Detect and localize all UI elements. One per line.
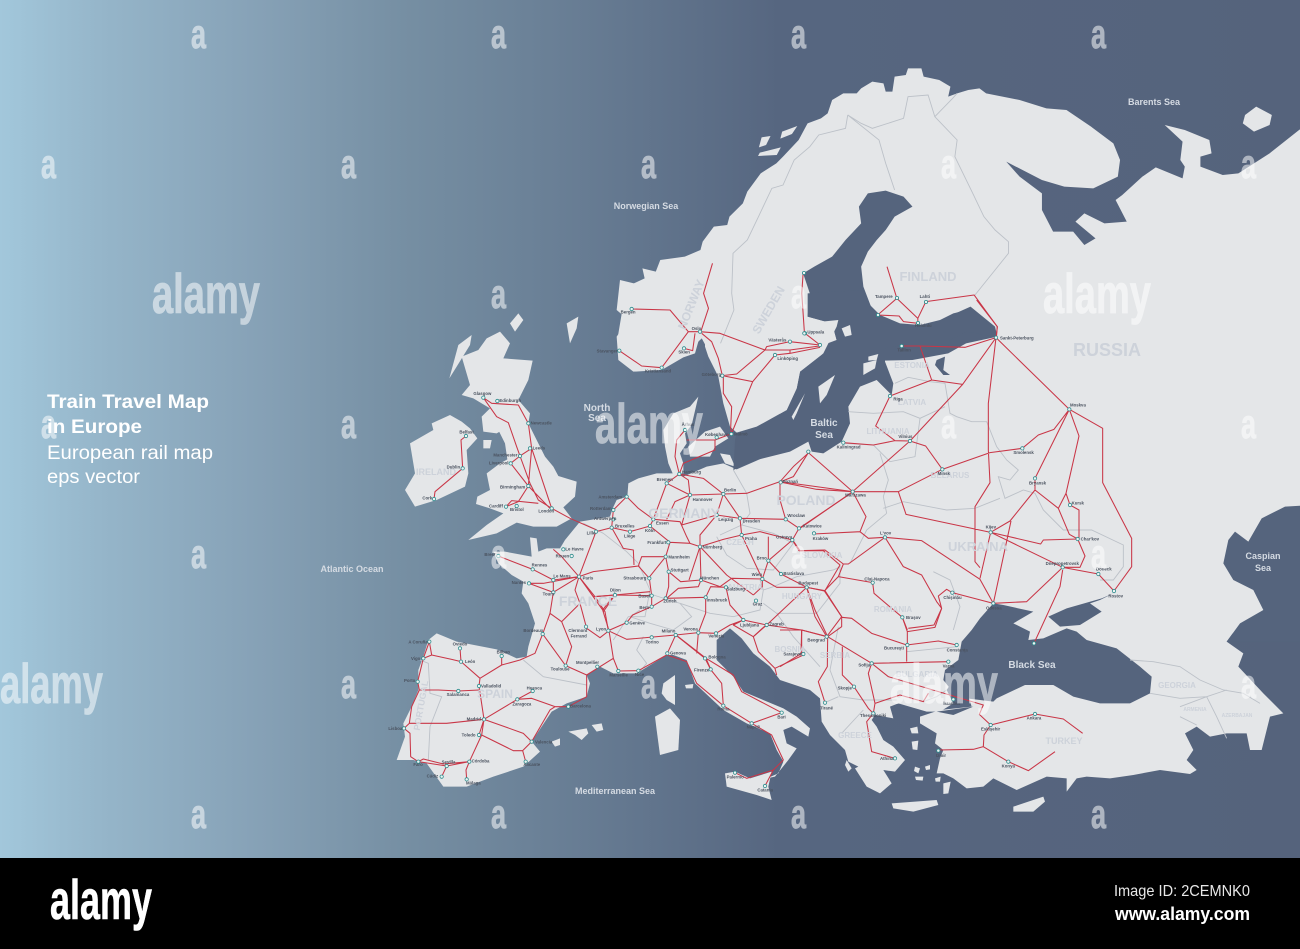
- city labels: Rouen: [556, 553, 569, 558]
- city labels: Helsinki: [915, 323, 932, 328]
- country labels: TURKEY: [1045, 736, 1083, 746]
- sea labels: Norwegian Sea: [614, 201, 679, 211]
- city labels: Nürnberg: [703, 544, 722, 549]
- title block: in Europe: [47, 417, 142, 438]
- city labels: Huesca: [527, 685, 543, 690]
- city labels: Birmingham: [500, 484, 525, 489]
- city labels: Valencia: [535, 740, 553, 745]
- city labels: Toledo: [462, 733, 476, 738]
- city labels: Cork: [422, 495, 433, 500]
- city labels: Malmö: [734, 432, 748, 437]
- title block: European rail map: [47, 443, 213, 464]
- country labels: LATVIA: [898, 398, 926, 407]
- city labels: Izmir: [936, 753, 946, 758]
- city labels: Kaliningrad: [837, 444, 861, 449]
- city labels: Constanţa: [947, 647, 968, 652]
- country labels: ROMANIA: [874, 605, 912, 614]
- city labels: Firenze: [694, 667, 710, 672]
- title block: [47, 392, 213, 488]
- watermarks: a: [41, 401, 57, 447]
- city labels: Riga: [893, 397, 903, 402]
- watermarks: a: [341, 141, 357, 187]
- city labels: Cardiff: [489, 504, 504, 509]
- country labels: ARMENIA: [1183, 707, 1207, 713]
- city labels: [388, 294, 1124, 792]
- city labels: Liverpool: [489, 460, 508, 465]
- city labels: Sevilla: [442, 759, 456, 764]
- city labels: Oviedo: [453, 641, 468, 646]
- city labels: Århus: [682, 422, 695, 427]
- watermarks: a: [791, 11, 807, 57]
- watermarks: alamy: [890, 652, 998, 715]
- watermarks: a: [491, 791, 507, 837]
- city labels: Bergen: [621, 309, 636, 314]
- country labels: SERBIA: [820, 651, 850, 660]
- watermarks: a: [791, 271, 807, 317]
- station markers: [402, 271, 1116, 788]
- watermarks: a: [641, 141, 657, 187]
- city labels: Bordeaux: [523, 628, 544, 633]
- city labels: Dublin: [447, 464, 460, 469]
- city labels: A Coruña: [408, 639, 428, 644]
- city labels: Doneck: [1096, 567, 1112, 572]
- city labels: Genève: [629, 621, 646, 626]
- city labels: Clermont: [568, 628, 588, 633]
- sea labels: Atlantic Ocean: [320, 564, 384, 574]
- country labels: GREECE: [838, 731, 873, 740]
- city labels: Le Havre: [565, 546, 584, 551]
- city labels: Genova: [670, 650, 686, 655]
- city labels: Vilnius: [898, 434, 913, 439]
- watermarks: a: [1091, 791, 1107, 837]
- city labels: Göteborg: [702, 372, 721, 377]
- city labels: Zürich: [663, 599, 677, 604]
- city labels: Kursk: [1072, 500, 1085, 505]
- watermarks: alamy: [152, 262, 260, 325]
- city labels: Verona: [683, 626, 698, 631]
- city labels: Minsk: [938, 471, 951, 476]
- city labels: Salzburg: [727, 587, 745, 592]
- sea labels: North: [584, 403, 610, 414]
- city labels: Eskişehir: [981, 727, 1001, 732]
- city labels: Lahti: [920, 294, 930, 299]
- country labels: POLAND: [776, 492, 836, 508]
- city labels: Cádiz: [427, 773, 438, 778]
- southern Scandinavia and Baltic islands: [617, 280, 878, 433]
- city labels: Bristol: [510, 507, 524, 512]
- city labels: Bruxelles: [615, 523, 635, 528]
- city labels: Barcelona: [570, 703, 592, 708]
- city labels: Uppsala: [807, 330, 825, 335]
- watermarks: a: [1241, 141, 1257, 187]
- watermarks: a: [191, 791, 207, 837]
- country labels: AZERBAJAN: [1222, 713, 1253, 719]
- city labels: Bari: [777, 715, 786, 720]
- seas cut out of the land: Baltic, Black Sea, Caspian: [733, 191, 1300, 715]
- city labels: Amsterdam: [598, 494, 622, 499]
- footer bar: alamy: [50, 868, 152, 931]
- country labels: SLOVAKIA: [802, 551, 843, 560]
- city labels: Antwerpen: [594, 516, 617, 521]
- watermarks: a: [491, 271, 507, 317]
- city labels: Köln: [645, 528, 655, 533]
- city labels: Lyon: [596, 626, 607, 631]
- city labels: Dresden: [743, 519, 760, 524]
- national borders: [420, 93, 1260, 760]
- city labels: Västerås: [768, 338, 787, 343]
- city labels: Catania: [757, 787, 774, 792]
- city labels: Toulouse: [551, 667, 570, 672]
- country labels: HUNGARY: [782, 592, 823, 601]
- country labels: SPAIN: [477, 687, 513, 701]
- city labels: Budapest: [798, 580, 819, 585]
- city labels: Porto: [404, 678, 416, 683]
- sea labels: Sea: [1255, 563, 1272, 573]
- country labels: FRANCE: [559, 593, 617, 609]
- city labels: Wien: [752, 572, 762, 577]
- city labels: Zaragoza: [512, 701, 532, 706]
- sea labels: [320, 97, 1281, 796]
- city labels: Bremen: [657, 477, 673, 482]
- city labels: Alicante: [523, 762, 541, 767]
- watermarks: alamy: [1043, 262, 1151, 325]
- country labels: ESTONIA: [894, 361, 930, 370]
- city labels: Ostrava: [776, 534, 793, 539]
- city labels: Faro: [413, 762, 423, 767]
- watermarks: a: [491, 11, 507, 57]
- city labels: Palermo: [727, 774, 744, 779]
- rail lines: eastern Europe: [780, 300, 1132, 630]
- city labels: Venezia: [708, 633, 725, 638]
- city labels: Tiranë: [820, 706, 834, 711]
- land masses: [397, 68, 1300, 812]
- watermarks: a: [641, 661, 657, 707]
- country labels: [412, 269, 1253, 746]
- city labels: München: [700, 575, 719, 580]
- city labels: Valladolid: [481, 683, 502, 688]
- watermarks: a: [1241, 401, 1257, 447]
- country labels: SWEDEN: [749, 284, 788, 336]
- city labels: Milano: [662, 629, 676, 634]
- watermarks: alamy: [0, 652, 103, 715]
- city labels: Sankt-Peterburg: [1000, 336, 1034, 341]
- city labels: İstanbul: [943, 701, 960, 706]
- watermarks: a: [941, 401, 957, 447]
- watermarks: a: [791, 531, 807, 577]
- city labels: Bryansk: [1029, 480, 1047, 485]
- city labels: Katowice: [803, 524, 822, 529]
- country labels: NORWAY: [675, 277, 708, 332]
- sea labels: Sea: [588, 413, 606, 424]
- city labels: Marseille: [609, 673, 628, 678]
- city labels: Basel: [638, 593, 650, 598]
- city labels: Bern: [639, 605, 650, 610]
- city labels: Thessaloniki: [860, 713, 886, 718]
- city labels: Konya: [1002, 764, 1015, 769]
- city labels: Paris: [583, 575, 594, 580]
- city labels: Frankfurt: [647, 540, 667, 545]
- city labels: Málaga: [466, 780, 481, 785]
- city labels: Kijev: [986, 524, 997, 529]
- sea labels: Black Sea: [1008, 660, 1056, 671]
- country labels: BOSNIA: [774, 645, 806, 654]
- city labels: Ferrand: [571, 634, 587, 639]
- city labels: Praha: [745, 536, 758, 541]
- city labels: Mannheim: [668, 554, 690, 559]
- city labels: Stavanger: [597, 348, 618, 353]
- city labels: Leipzig: [718, 517, 734, 522]
- sea labels: Baltic: [810, 418, 838, 429]
- city labels: Innsbruck: [707, 597, 728, 602]
- watermarks: a: [791, 791, 807, 837]
- city labels: Strasbourg: [623, 575, 647, 580]
- country labels: LITHUANIA: [866, 427, 910, 436]
- city labels: Torino: [646, 639, 659, 644]
- city labels: Braşov: [906, 615, 921, 620]
- watermarks: a: [1241, 661, 1257, 707]
- city labels: Linköping: [777, 356, 798, 361]
- rail lines: France, Iberia and Italy: [404, 549, 803, 786]
- city labels: Bratislava: [783, 571, 805, 576]
- city labels: Rotterdam: [590, 506, 612, 511]
- country labels: CZECH: [726, 538, 754, 547]
- watermarks: a: [1091, 531, 1107, 577]
- city labels: Brest: [484, 552, 496, 557]
- city labels: Córdoba: [472, 759, 490, 764]
- country labels: BELARUS: [931, 471, 970, 480]
- city labels: Athina: [880, 756, 894, 761]
- city labels: Skopje: [838, 685, 852, 690]
- country labels: IRELAND: [416, 467, 456, 477]
- city labels: Lille: [587, 530, 596, 535]
- city labels: Le Mans: [553, 574, 571, 579]
- title block: eps vector: [47, 467, 141, 488]
- country labels: UKRAINA: [948, 539, 1009, 554]
- city labels: Dnepropetrovsk: [1046, 561, 1079, 566]
- city labels: Varna: [943, 664, 955, 669]
- city labels: Beograd: [807, 638, 825, 643]
- city labels: L'vov: [880, 530, 892, 535]
- watermarks: a: [941, 141, 957, 187]
- city labels: Hannover: [693, 497, 713, 502]
- city labels: Warszawa: [845, 493, 866, 498]
- sea labels: Sea: [815, 430, 833, 441]
- city labels: Skien: [678, 349, 690, 354]
- city labels: Liège: [624, 534, 636, 539]
- city labels: København: [705, 432, 729, 437]
- watermarks: a: [1091, 11, 1107, 57]
- city labels: Stuttgart: [671, 568, 689, 573]
- city labels: Belfast: [459, 429, 474, 434]
- city labels: Poznań: [783, 479, 798, 484]
- country labels: PORTUGAL: [412, 679, 430, 731]
- rail lines: Balkans and Turkey: [780, 570, 1083, 771]
- footer bar: Image ID: 2CEMNK0: [1114, 883, 1250, 900]
- city labels: Roma: [717, 707, 730, 712]
- city labels: León: [465, 659, 476, 664]
- city labels: Cluj-Napoca: [864, 576, 890, 581]
- city labels: Wroclaw: [787, 513, 806, 518]
- sea labels: Barents Sea: [1128, 97, 1181, 107]
- city labels: Edinburgh: [499, 398, 521, 403]
- country labels: RUSSIA: [1073, 340, 1141, 360]
- city labels: Odessa: [986, 605, 1002, 610]
- footer bar: www.alamy.com: [1114, 904, 1250, 924]
- city labels: Montpellier: [576, 660, 599, 665]
- rail lines: northern Scandinavia and Finland: [700, 263, 997, 337]
- city labels: Manchester: [493, 453, 518, 458]
- city labels: Char'kov: [1081, 536, 1100, 541]
- city labels: Bologna: [708, 654, 726, 659]
- sea labels: Caspian: [1245, 551, 1281, 561]
- country labels: AUSTRIA: [727, 583, 763, 592]
- watermarks: a: [191, 531, 207, 577]
- city labels: Sofija: [858, 662, 871, 667]
- city labels: Madrid: [467, 717, 481, 722]
- city labels: Ankara: [1027, 716, 1042, 721]
- city labels: Lisboa: [388, 726, 403, 731]
- rail lines: central Europe: [579, 453, 853, 669]
- city labels: Vigo: [411, 656, 421, 661]
- city labels: Tampere: [875, 294, 893, 299]
- city labels: Tours: [543, 591, 555, 596]
- city labels: Salamanca: [447, 692, 470, 697]
- city labels: Bilbao: [497, 649, 510, 654]
- city labels: Moskva: [1070, 403, 1086, 408]
- city labels: Glasgow: [473, 391, 492, 396]
- city labels: London: [538, 508, 555, 513]
- city labels: Ljubljana: [740, 622, 760, 627]
- city labels: Brno: [757, 555, 767, 560]
- watermarks: alamy: [595, 392, 703, 455]
- city labels: Graz: [753, 602, 762, 607]
- city labels: Zagreb: [769, 622, 784, 627]
- city labels: Leeds: [533, 445, 546, 450]
- city labels: Nantes: [512, 580, 527, 585]
- city labels: Berlin: [724, 487, 737, 492]
- country labels: FINLAND: [899, 269, 957, 284]
- sea labels: Mediterranean Sea: [575, 786, 656, 796]
- city labels: Rostov: [1108, 593, 1124, 598]
- city labels: Tallinn: [897, 348, 911, 353]
- country labels: GERMANY: [648, 505, 720, 521]
- city labels: Hamburg: [682, 469, 701, 474]
- rail lines: British Isles and Scandinavia: [434, 309, 820, 530]
- country labels: BULGARIA: [896, 670, 938, 679]
- city labels: Napoli: [747, 724, 760, 729]
- country labels: GEORGIA: [1158, 681, 1196, 690]
- city labels: Oslo: [692, 326, 702, 331]
- city labels: Sarajevo: [783, 652, 802, 657]
- watermarks: a: [191, 11, 207, 57]
- city labels: Dijon: [610, 588, 621, 593]
- watermarks: a: [341, 661, 357, 707]
- city labels: Chişinău: [943, 595, 962, 600]
- city labels: Bucureşti: [884, 645, 904, 650]
- rail network: [404, 263, 1132, 786]
- footer bar: [0, 858, 1300, 949]
- city labels: Newcastle: [531, 420, 552, 425]
- watermarks: a: [41, 141, 57, 187]
- city labels: Essen: [656, 521, 669, 526]
- title block: Train Travel Map: [47, 392, 209, 413]
- city labels: Rennes: [532, 563, 548, 568]
- city labels: Nice: [635, 672, 645, 677]
- watermarks: a: [341, 401, 357, 447]
- city labels: Smolensk: [1013, 450, 1034, 455]
- city labels: Kraków: [813, 536, 829, 541]
- city labels: Kristiansand: [645, 369, 672, 374]
- watermarks: a: [491, 531, 507, 577]
